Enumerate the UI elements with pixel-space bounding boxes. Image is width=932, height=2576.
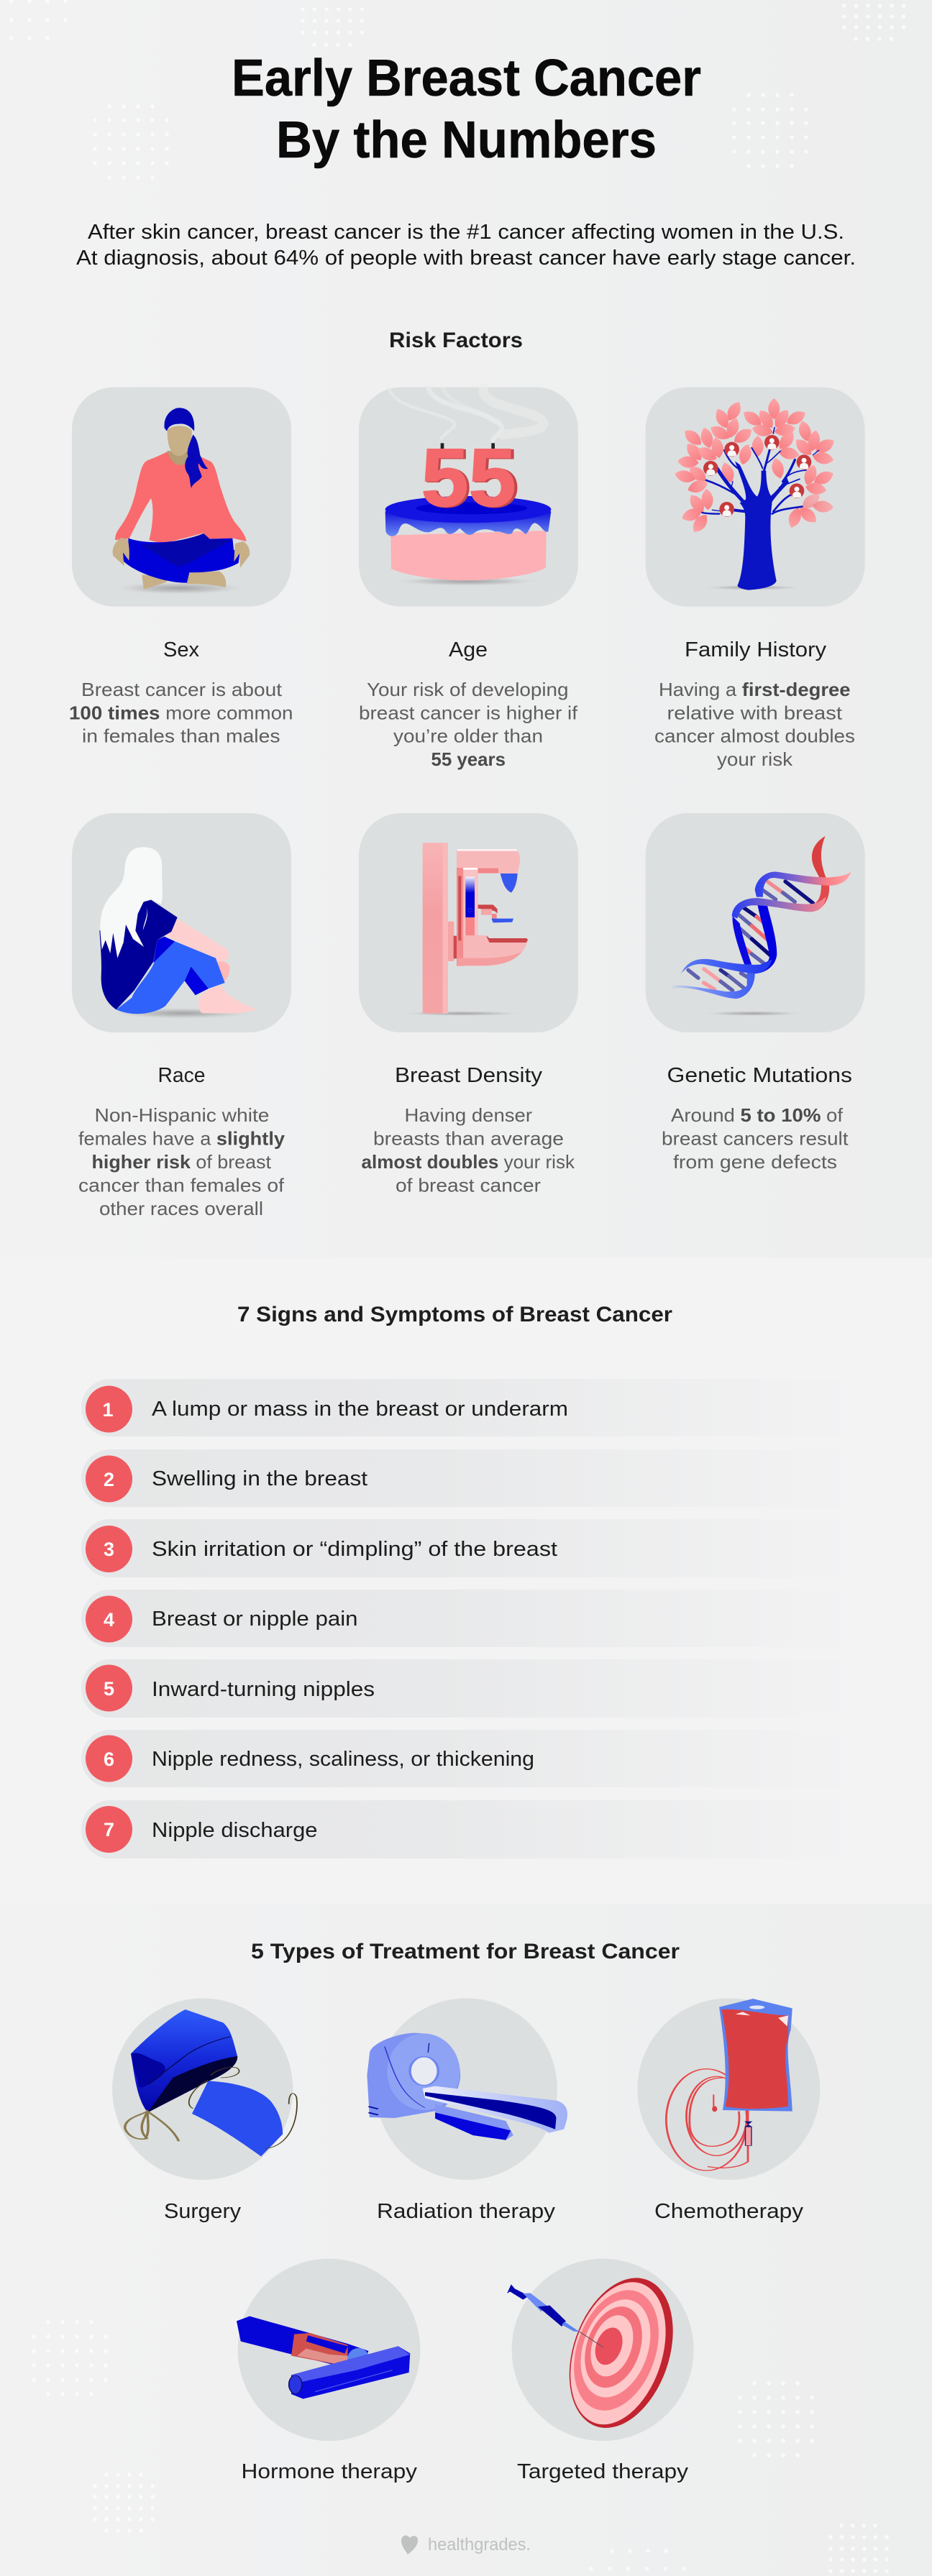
heading: signs and symptoms: 7 Signs and Symptoms of Breast Cancer <box>237 1303 672 1326</box>
label: Family History <box>685 638 827 661</box>
symptom 6: Nipple redness, scaliness, or thickening <box>152 1748 534 1771</box>
icon: surgical cap and mask <box>112 1998 297 2180</box>
panel: age <box>359 388 578 770</box>
intro text <box>76 221 856 270</box>
label: Targeted therapy <box>517 2460 689 2483</box>
symptom 5: Inward-turning nipples <box>152 1678 375 1701</box>
description <box>654 679 855 770</box>
description: 55 years <box>431 748 506 770</box>
symptom 4 <box>81 1590 863 1647</box>
symptom 5: 5 <box>104 1678 114 1700</box>
symptom 5 <box>81 1659 863 1718</box>
symptom 1: 1 <box>102 1399 114 1421</box>
description: breasts than average <box>373 1127 564 1149</box>
description: almost doubles your risk <box>361 1151 575 1173</box>
panel: race <box>72 813 291 1219</box>
trunk and branches <box>735 461 789 590</box>
label: Breast Density <box>395 1064 543 1087</box>
icon: IV bag <box>637 1998 820 2180</box>
heading: risk factors: Risk Factors <box>389 329 523 352</box>
panel: family history <box>646 388 865 770</box>
symptom 7: 7 <box>104 1819 114 1841</box>
treatment: surgery <box>112 1998 297 2223</box>
description: breast cancer is higher if <box>359 702 578 723</box>
description: other races overall <box>99 1198 263 1219</box>
description: Breast cancer is about <box>81 679 283 700</box>
description: from gene defects <box>673 1151 837 1173</box>
treatment: radiation therapy <box>367 1998 567 2223</box>
icon: DNA helix <box>646 813 865 1032</box>
icon: birthday cake <box>359 388 578 607</box>
symptom 2: Swelling in the breast <box>152 1467 367 1490</box>
symptom 7 <box>81 1800 863 1858</box>
label: Surgery <box>164 2200 242 2223</box>
intro text: At diagnosis, about 64% of people with breast cancer have early stage cancer. <box>76 247 856 270</box>
label: Radiation therapy <box>377 2200 556 2223</box>
icon: target and syringe <box>507 2259 694 2441</box>
label: Hormone therapy <box>242 2460 418 2483</box>
label: Sex <box>163 638 199 661</box>
treatment: chemotherapy <box>637 1998 820 2223</box>
description: females have a slightly <box>78 1127 285 1149</box>
panel: sex <box>69 388 293 746</box>
list: symptoms <box>81 1379 863 1858</box>
logo: healthgrades: healthgrades. <box>428 2535 531 2554</box>
description: of breast cancer <box>396 1175 541 1196</box>
title <box>232 50 701 169</box>
title: Early Breast Cancer <box>232 50 701 107</box>
description <box>359 679 578 770</box>
description: higher risk of breast <box>92 1151 272 1173</box>
label: Chemotherapy <box>654 2200 804 2223</box>
symptom 4: Breast or nipple pain <box>152 1608 358 1631</box>
icon: seated woman <box>72 388 291 607</box>
leaves <box>673 398 837 536</box>
relatives <box>703 435 811 517</box>
description: Your risk of developing <box>367 679 568 700</box>
description: your risk <box>717 748 793 770</box>
symptom 7: Nipple discharge <box>152 1819 318 1842</box>
label: Genetic Mutations <box>667 1064 852 1087</box>
icon: family tree <box>646 388 865 607</box>
icon: seated woman with white hair <box>72 813 291 1032</box>
description: breast cancers result <box>662 1127 849 1149</box>
description: 100 times more common <box>69 702 293 723</box>
symptom 3: 3 <box>104 1539 114 1560</box>
symptom 1 <box>81 1379 863 1436</box>
description: Having denser <box>404 1104 532 1126</box>
description: you’re older than <box>393 725 543 746</box>
symptoms section band <box>0 1257 932 1904</box>
description: Having a first-degree <box>659 679 850 700</box>
icon: mammography machine <box>359 813 578 1032</box>
candles: 55 <box>423 434 519 525</box>
symptom 2: 2 <box>104 1469 114 1490</box>
symptom 1: A lump or mass in the breast or underarm <box>152 1398 568 1421</box>
description: in females than males <box>82 725 280 746</box>
description: Non-Hispanic white <box>95 1104 269 1126</box>
icon: CT scanner <box>367 1998 567 2180</box>
panel: genetic mutations <box>646 813 865 1173</box>
description <box>78 1104 285 1219</box>
icon: birthday cake: 55 <box>421 432 516 523</box>
symptom 3: Skin irritation or “dimpling” of the breast <box>152 1538 557 1561</box>
symptom 6 <box>81 1730 863 1787</box>
intro text: After skin cancer, breast cancer is the #1 cancer affecting women in the U.S. <box>88 221 844 244</box>
symptom 6: 6 <box>104 1748 114 1770</box>
symptom 2 <box>81 1449 863 1507</box>
description: cancer than females of <box>78 1175 285 1196</box>
strands <box>669 973 755 999</box>
description: relative with breast <box>667 702 843 723</box>
treatment: hormone therapy <box>237 2259 420 2483</box>
description: Around 5 to 10% of <box>671 1104 844 1126</box>
treatment: targeted therapy <box>507 2259 694 2483</box>
description <box>69 679 293 746</box>
heading: treatment: 5 Types of Treatment for Breast Cancer <box>251 1940 680 1963</box>
icon: injector pen <box>237 2259 420 2441</box>
symptom 3 <box>81 1519 863 1577</box>
description <box>361 1104 575 1196</box>
rungs <box>688 881 813 991</box>
description <box>662 1104 849 1173</box>
label: Age <box>449 638 488 661</box>
label: Race <box>158 1064 206 1087</box>
panel: breast density <box>359 813 578 1196</box>
smoke <box>389 388 544 441</box>
description: cancer almost doubles <box>654 725 855 746</box>
title: By the Numbers <box>276 111 657 169</box>
symptom 4: 4 <box>104 1609 114 1631</box>
